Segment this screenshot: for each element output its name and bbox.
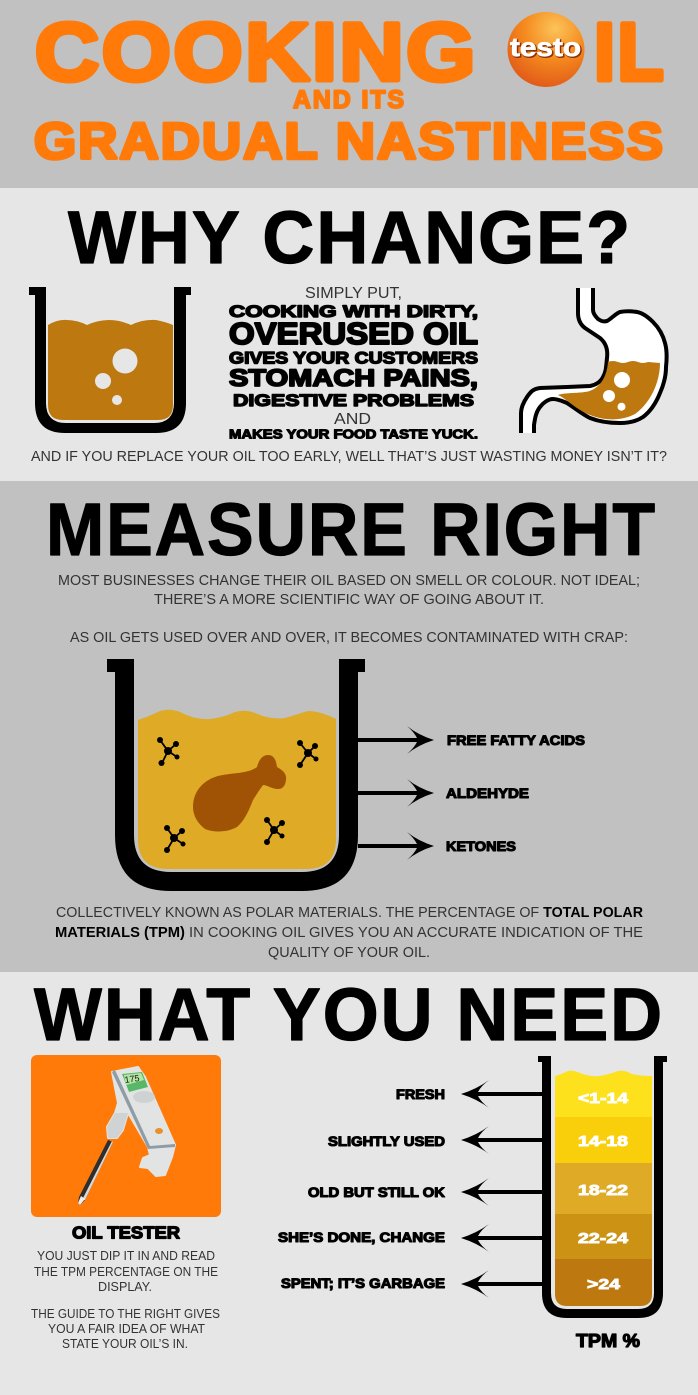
text: the guide: THE GUIDE TO THE RIGHT GIVES	[31, 1306, 220, 1321]
heading: why change: WHY CHANGE?	[68, 196, 632, 279]
values: 14-18	[578, 1133, 628, 1150]
title: il: IL	[594, 7, 666, 98]
text: replacing too early: AND IF YOU REPLACE YOUR OIL TOO EARLY, WELL THAT’S JUST WASTING MONEY ISN’T IT?	[31, 448, 667, 465]
icon: molecule	[157, 737, 180, 766]
icon: tester body	[107, 1067, 175, 1176]
heading: measure right: MEASURE RIGHT	[46, 488, 657, 571]
text: digestive problems: DIGESTIVE PROBLEMS	[233, 391, 474, 410]
panel: why change	[0, 188, 698, 481]
panel: measure right	[0, 481, 698, 972]
label: old but still ok: OLD BUT STILL OK	[308, 1185, 445, 1200]
arrow: ketones	[358, 832, 434, 860]
text: polar materials: COLLECTIVELY KNOWN AS POLAR MATERIALS. THE PERCENTAGE OF TOTAL POLAR	[56, 905, 644, 921]
text: tpm indication: MATERIALS (TPM) IN COOKING OIL GIVES YOU AN ACCURATE INDICATION OF THE	[55, 925, 643, 941]
text: dip it in: YOU JUST DIP IT IN AND READ	[37, 1248, 215, 1263]
label: slightly used: SLIGHTLY USED	[328, 1134, 445, 1149]
text: the guide: YOU A FAIR IDEA OF WHAT	[48, 1321, 205, 1336]
text: stomach pains: STOMACH PAINS,	[229, 365, 478, 392]
title: cooking: COOKING	[35, 7, 478, 98]
arrow: slightly used	[461, 1126, 542, 1154]
panel: title	[0, 0, 698, 188]
icon: chicken drumstick	[193, 755, 286, 831]
label: fresh: FRESH	[396, 1087, 445, 1102]
icon: molecule	[297, 740, 318, 768]
label: spent: SPENT; IT’S GARBAGE	[281, 1276, 445, 1291]
values: 22-24	[578, 1230, 629, 1247]
text: dip it in: THE TPM PERCENTAGE ON THE	[34, 1264, 218, 1279]
heading: oil tester: OIL TESTER	[72, 1222, 180, 1242]
arrow: she's done	[461, 1224, 542, 1252]
text: contaminated: AS OIL GETS USED OVER AND OVER, IT BECOMES CONTAMINATED WITH CRAP:	[70, 630, 628, 646]
icon: beaker of dirty oil	[29, 287, 191, 433]
text: quality: QUALITY OF YOUR OIL.	[268, 945, 430, 961]
label: she's done: SHE’S DONE, CHANGE	[278, 1230, 445, 1245]
arrow: free fatty acids	[358, 726, 434, 754]
icon: testo egg logo	[508, 12, 584, 87]
values: <1-14	[578, 1090, 629, 1107]
label: tpm percent: TPM %	[576, 1331, 640, 1351]
text: the guide	[31, 1306, 220, 1351]
icon: testo egg logo: testo	[510, 32, 581, 62]
chart: tpm beaker scale	[538, 1056, 667, 1318]
text: dip it in	[34, 1248, 218, 1294]
values	[578, 1090, 629, 1293]
icon: tester logo	[155, 1128, 163, 1134]
arrow: fresh	[461, 1080, 542, 1108]
title: gradual nastiness: GRADUAL NASTINESS	[34, 112, 665, 170]
card: oil tester photo	[31, 1055, 221, 1217]
icon: testo egg logo: testo	[511, 33, 582, 63]
icon: molecule	[164, 825, 186, 853]
label: ketones: KETONES	[446, 839, 516, 854]
text: dip it in: DISPLAY.	[98, 1279, 152, 1294]
icon: tester probe	[78, 1140, 113, 1205]
arrow: aldehyde	[358, 779, 434, 807]
text: gives your customers: GIVES YOUR CUSTOMERS	[229, 350, 478, 368]
values: >24	[587, 1276, 621, 1293]
tester display reading: 175	[124, 1073, 140, 1085]
illustration: contaminated oil beaker	[107, 659, 365, 891]
title: and its: AND ITS	[293, 86, 406, 114]
icon: stomach with oil	[515, 280, 667, 441]
arrow: spent	[461, 1270, 542, 1298]
text: simply put: SIMPLY PUT,	[305, 285, 402, 302]
text: makes your food taste yuck: MAKES YOUR FOOD TASTE YUCK.	[229, 428, 478, 442]
icon: tester screen	[122, 1072, 148, 1092]
label: free fatty acids: FREE FATTY ACIDS	[447, 733, 585, 748]
text: and: AND	[334, 411, 371, 428]
text: scientific way: THERE’S A MORE SCIENTIFIC WAY OF GOING ABOUT IT.	[154, 592, 544, 608]
values: 18-22	[578, 1182, 628, 1199]
icon: tester buttons	[133, 1091, 155, 1103]
text: overused oil: OVERUSED OIL	[229, 316, 478, 351]
text: the guide: STATE YOUR OIL’S IN.	[62, 1336, 188, 1351]
panel: what you need	[0, 972, 698, 1395]
text: smell or colour: MOST BUSINESSES CHANGE THEIR OIL BASED ON SMELL OR COLOUR. NOT IDEAL;	[58, 573, 640, 589]
icon: molecule	[264, 817, 285, 845]
arrow: old but still ok	[461, 1178, 542, 1206]
heading: what you need: WHAT YOU NEED	[34, 973, 664, 1056]
label: aldehyde: ALDEHYDE	[446, 786, 529, 801]
text: cooking with dirty: COOKING WITH DIRTY,	[229, 303, 478, 321]
